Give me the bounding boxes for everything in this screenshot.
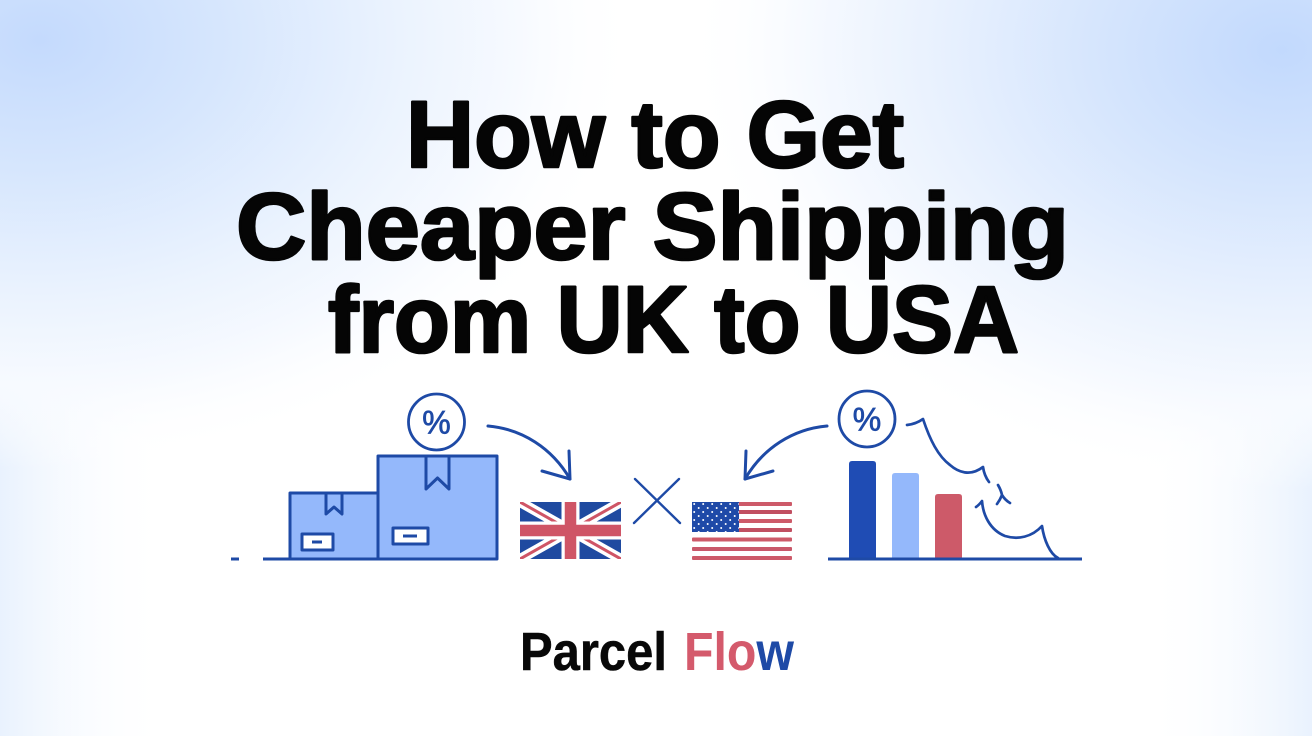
- illustration: parcels: [231, 456, 497, 559]
- title: How to Get: [406, 82, 904, 188]
- icon: percent badge left: %: [422, 404, 451, 440]
- icon: cross between flags: [634, 479, 680, 523]
- title: [236, 82, 1069, 373]
- arrow: to US flag: [745, 426, 827, 479]
- logo: Flow: [684, 622, 795, 682]
- icon: UK flag: [520, 502, 621, 559]
- icon: percent badge right: %: [853, 402, 881, 438]
- bar chart: [828, 461, 1082, 559]
- logo: Parcel: [520, 622, 667, 682]
- decline curve: [907, 419, 1058, 558]
- arrow: to UK flag: [488, 426, 570, 479]
- icon: US flag: [692, 502, 792, 560]
- title: Cheaper Shipping: [236, 174, 1069, 280]
- logo: [520, 622, 795, 682]
- icon: percent badge left: [408, 394, 464, 450]
- title: from UK to USA: [328, 267, 1019, 373]
- icon: percent badge right: [839, 391, 895, 447]
